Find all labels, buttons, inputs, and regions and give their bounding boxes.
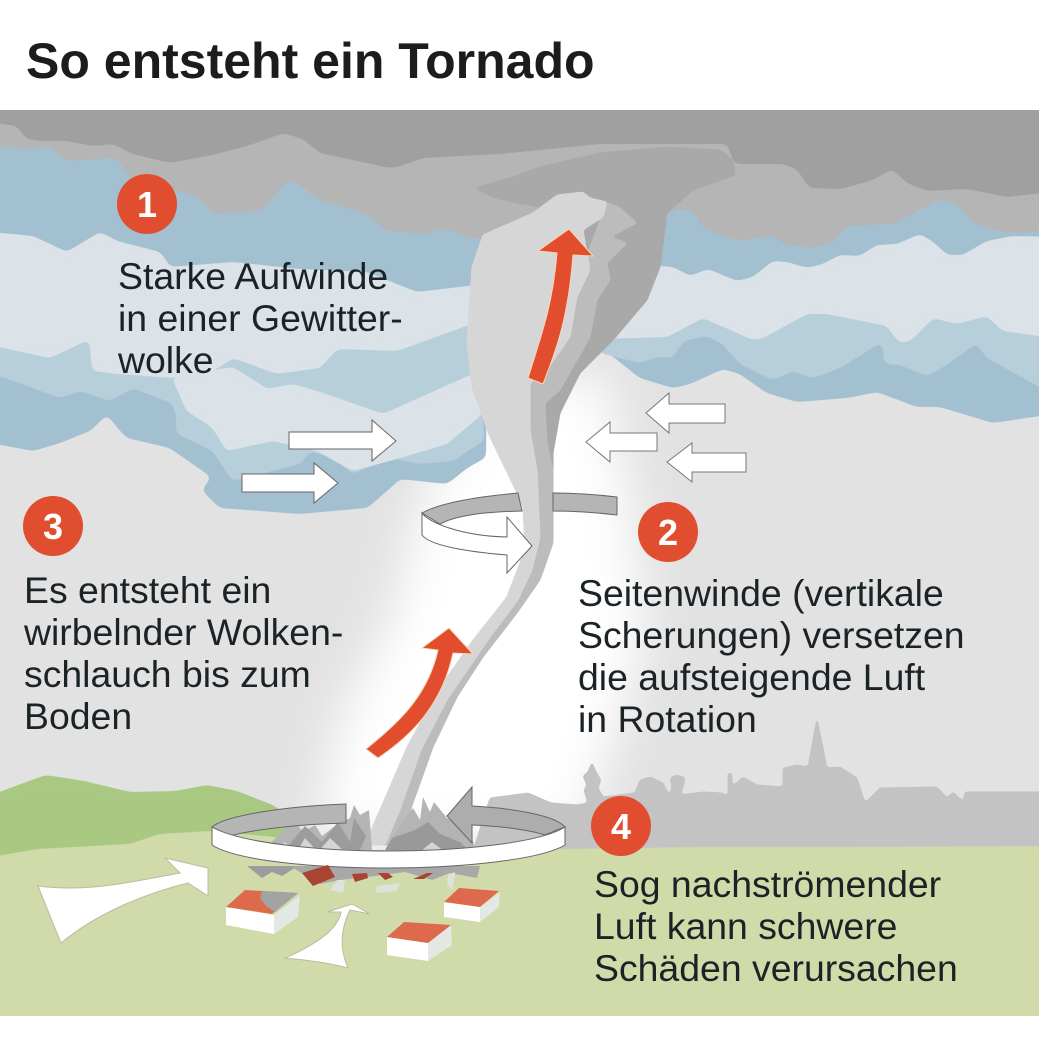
wind arrow 2	[242, 463, 338, 503]
step 1 badge: 1	[137, 184, 157, 225]
wind arrows from the left	[242, 420, 396, 503]
step 4 badge: 4	[611, 806, 631, 847]
ring: back right arrow	[447, 787, 565, 843]
wind arrow: small ground inflow	[285, 904, 370, 968]
tornado	[365, 147, 735, 845]
sky background	[0, 352, 1039, 850]
rotation arrow front	[422, 513, 532, 573]
red arrow: lower updraft	[366, 628, 473, 758]
rotation band back right	[553, 493, 617, 515]
step 2 text: in Rotation	[578, 698, 757, 740]
step 2 badge: 2	[658, 512, 678, 553]
white glow around tornado	[315, 370, 645, 840]
green hill	[0, 776, 286, 856]
wind arrow: large ground inflow	[38, 858, 208, 943]
step 2 text: die aufsteigende Luft	[578, 656, 926, 698]
house	[444, 888, 500, 922]
wind arrow 3	[646, 393, 725, 433]
house	[387, 922, 452, 961]
flying roof debris	[302, 865, 455, 893]
wind arrows from the right	[586, 393, 746, 482]
step 4 text: Sog nachströmender	[594, 863, 941, 905]
step 1 text: in einer Gewitter-	[118, 297, 403, 339]
clouds: blue layers left	[0, 146, 486, 514]
ring: front band	[212, 827, 565, 868]
tornado: dark outer funnel	[476, 146, 735, 470]
step 2 text: Seitenwinde (vertikale	[578, 572, 944, 614]
tornado: mid grey layer	[365, 202, 637, 845]
wind arrow 4	[586, 422, 657, 462]
wind arrow 1	[289, 420, 396, 461]
debris above ground	[247, 797, 480, 884]
ground	[0, 831, 1039, 1016]
step 2 badge	[638, 502, 698, 562]
step 3 text: schlauch bis zum	[24, 653, 311, 695]
step 3 text: wirbelnder Wolken-	[23, 611, 343, 653]
house: damaged	[226, 890, 300, 934]
title: So entsteht ein Tornado	[26, 33, 595, 89]
storm cloud: grey layers	[0, 110, 1039, 248]
step 3 text: Boden	[24, 695, 132, 737]
step 1 text: wolke	[117, 339, 214, 381]
wind arrow 5	[667, 443, 746, 482]
step 3 badge	[23, 496, 83, 556]
step 2 text: Scherungen) versetzen	[578, 614, 965, 656]
tornado: light front layer	[365, 192, 607, 845]
step 4 text: Luft kann schwere	[594, 905, 897, 947]
rotation band back	[422, 493, 522, 524]
red arrow: upper updraft	[528, 229, 593, 384]
clouds: blue layers right	[602, 200, 1039, 422]
step 4 badge	[591, 796, 651, 856]
step 1 text: Starke Aufwinde	[118, 255, 388, 297]
rotation arrow around funnel	[422, 493, 617, 573]
ring: back left band	[212, 804, 346, 836]
step 4 text: Schäden verursachen	[594, 947, 958, 989]
step 1 badge	[117, 174, 177, 234]
step 3 badge: 3	[43, 506, 63, 547]
ring arrow on ground	[212, 787, 565, 868]
step 3 text: Es entsteht ein	[24, 569, 271, 611]
town silhouette	[474, 721, 1039, 850]
